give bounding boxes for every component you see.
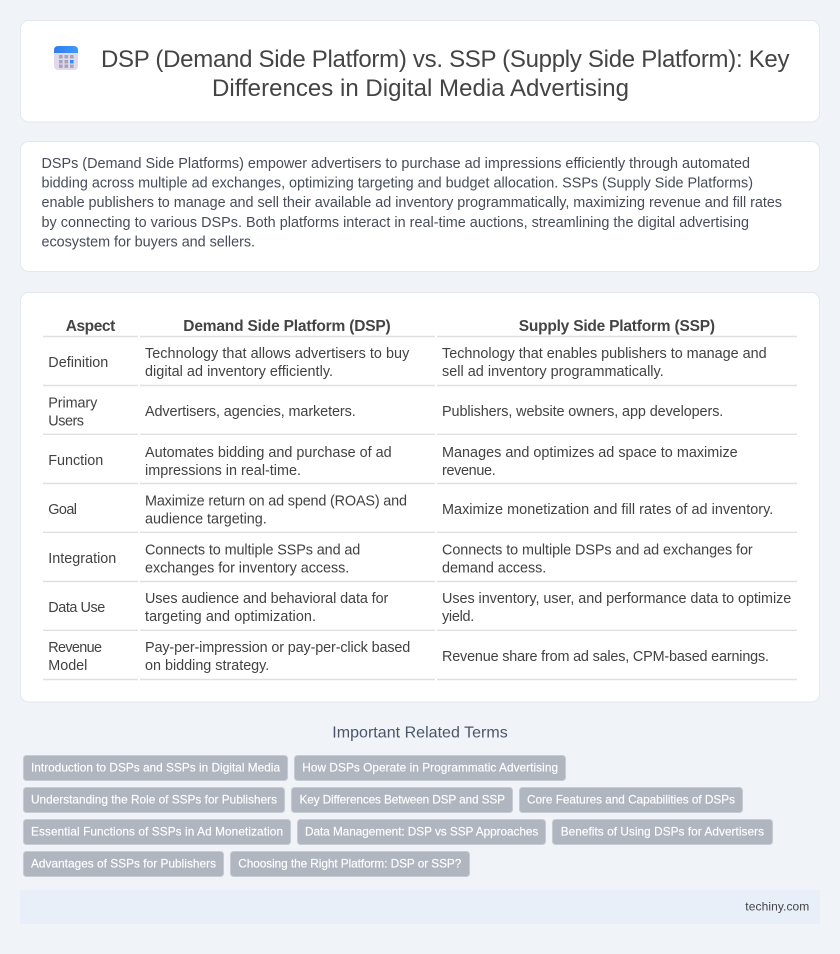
panel: related term chips bbox=[24, 756, 772, 876]
table row: integration: demand access. bbox=[442, 560, 546, 576]
title bbox=[101, 46, 790, 102]
table header row bbox=[43, 318, 797, 336]
table row: definition: Technology that allows advertisers to buy bbox=[145, 346, 410, 362]
table row: data use: Uses inventory, user, and performance data to optimize bbox=[442, 591, 791, 607]
table row: revenue model: Revenue share from ad sales, CPM-based earnings. bbox=[442, 649, 769, 665]
footer bbox=[20, 890, 820, 924]
table row: primary users: Primary bbox=[48, 396, 98, 412]
title: Differences in Digital Media Advertising bbox=[212, 75, 629, 102]
table row: integration: Integration bbox=[48, 551, 116, 567]
chip: choosing platform bbox=[230, 852, 470, 876]
table row: goal: Goal bbox=[48, 502, 77, 518]
chip: data management: Data Management: DSP vs SSP Approaches bbox=[305, 824, 538, 838]
table row: primary users: Publishers, website owners, app developers. bbox=[442, 404, 723, 420]
chip: introduction: Introduction to DSPs and SSPs in Digital Media bbox=[31, 760, 280, 774]
table row: function: Automates bidding and purchase of ad bbox=[145, 445, 392, 461]
table row: revenue model bbox=[43, 640, 797, 680]
table row: data use: Data Use bbox=[48, 600, 105, 616]
text block: introduction paragraph: DSPs (Demand Side Platforms) empower advertisers to purchase ad impressions efficiently through automated bbox=[42, 156, 750, 172]
chip: introduction bbox=[24, 756, 288, 780]
text block: introduction paragraph bbox=[42, 156, 782, 250]
table row: data use bbox=[43, 591, 797, 630]
table row: definition: Technology that enables publishers to manage and bbox=[442, 346, 767, 362]
table header row: Aspect bbox=[66, 318, 115, 335]
chip: advantages bbox=[24, 852, 224, 876]
chip: benefits: Benefits of Using DSPs for Advertisers bbox=[561, 824, 764, 838]
chip: how DSPs operate bbox=[294, 756, 566, 780]
table row: primary users: Users bbox=[48, 414, 84, 430]
table row: goal: Maximize return on ad spend (ROAS) and bbox=[145, 493, 407, 509]
table row: function: Manages and optimizes ad space to maximize bbox=[442, 445, 738, 461]
chip: data management bbox=[298, 820, 546, 844]
chip: essential functions bbox=[24, 820, 290, 844]
heading: important related terms: Important Related Terms bbox=[332, 724, 508, 742]
table row: definition: digital ad inventory efficiently. bbox=[145, 364, 333, 380]
table row: data use: targeting and optimization. bbox=[145, 609, 316, 625]
table row: revenue model: Model bbox=[48, 658, 87, 674]
panel: comparison table bbox=[20, 292, 820, 702]
table header row: Supply Side Platform (SSP) bbox=[519, 318, 715, 335]
table row: revenue model: Revenue bbox=[48, 640, 102, 656]
text block: introduction paragraph: bidding across multiple ad exchanges, optimizing targeting and budget allocation. SSPs (Supply Side Platforms) bbox=[42, 176, 753, 192]
table row: definition: sell ad inventory programmatically. bbox=[442, 364, 664, 380]
table row: integration bbox=[43, 542, 797, 582]
table row: integration: Connects to multiple SSPs and ad bbox=[145, 542, 360, 558]
table row: function bbox=[43, 445, 797, 484]
table row: goal: audience targeting. bbox=[145, 511, 267, 527]
table row: goal bbox=[43, 493, 797, 532]
table row: definition: Definition bbox=[48, 355, 108, 371]
table row: function: Function bbox=[48, 453, 103, 469]
chip: core features: Core Features and Capabilities of DSPs bbox=[527, 792, 735, 806]
chip: key differences: Key Differences Between DSP and SSP bbox=[300, 792, 505, 806]
table row: data use: yield. bbox=[442, 609, 474, 625]
chip: key differences bbox=[292, 788, 512, 812]
table header row: Demand Side Platform (DSP) bbox=[183, 318, 391, 335]
footer: techiny.com bbox=[745, 900, 809, 914]
title: DSP (Demand Side Platform) vs. SSP (Supply Side Platform): Key bbox=[101, 46, 790, 73]
table row: goal: Maximize monetization and fill rates of ad inventory. bbox=[442, 502, 773, 518]
chip: role of SSPs: Understanding the Role of SSPs for Publishers bbox=[31, 792, 277, 806]
chip: essential functions: Essential Functions of SSPs in Ad Monetization bbox=[31, 824, 283, 838]
chip: how DSPs operate: How DSPs Operate in Programmatic Advertising bbox=[302, 760, 558, 774]
table row: integration: Connects to multiple DSPs and ad exchanges for bbox=[442, 542, 753, 558]
table row: function: revenue. bbox=[442, 463, 496, 479]
panel: title header bbox=[20, 20, 820, 122]
panel: introduction bbox=[20, 142, 820, 272]
table row: definition bbox=[43, 346, 797, 386]
chip: advantages: Advantages of SSPs for Publishers bbox=[31, 856, 216, 870]
table row: function: impressions in real-time. bbox=[145, 463, 301, 479]
chip: choosing platform: Choosing the Right Platform: DSP or SSP? bbox=[238, 856, 462, 870]
table row: primary users bbox=[43, 396, 797, 434]
table row: primary users: Advertisers, agencies, marketers. bbox=[145, 404, 356, 420]
table row: integration: exchanges for inventory access. bbox=[145, 560, 349, 576]
table row: revenue model: Pay-per-impression or pay-per-click based bbox=[145, 640, 410, 656]
table row: data use: Uses audience and behavioral data for bbox=[145, 591, 389, 607]
table row: revenue model: on bidding strategy. bbox=[145, 658, 269, 674]
text block: introduction paragraph: enable publishers to manage and sell their available ad inventory programmatically, maximizing revenue and fill rates bbox=[42, 195, 782, 211]
chip: role of SSPs bbox=[24, 788, 284, 812]
text block: introduction paragraph: by connecting to various DSPs. Both platforms interact in real-time auctions, streamlining the digital advertising bbox=[42, 215, 749, 231]
text block: introduction paragraph: ecosystem for buyers and sellers. bbox=[42, 234, 255, 250]
chip: benefits bbox=[552, 820, 772, 844]
chip: core features bbox=[520, 788, 742, 812]
icon: calendar bbox=[54, 46, 78, 70]
